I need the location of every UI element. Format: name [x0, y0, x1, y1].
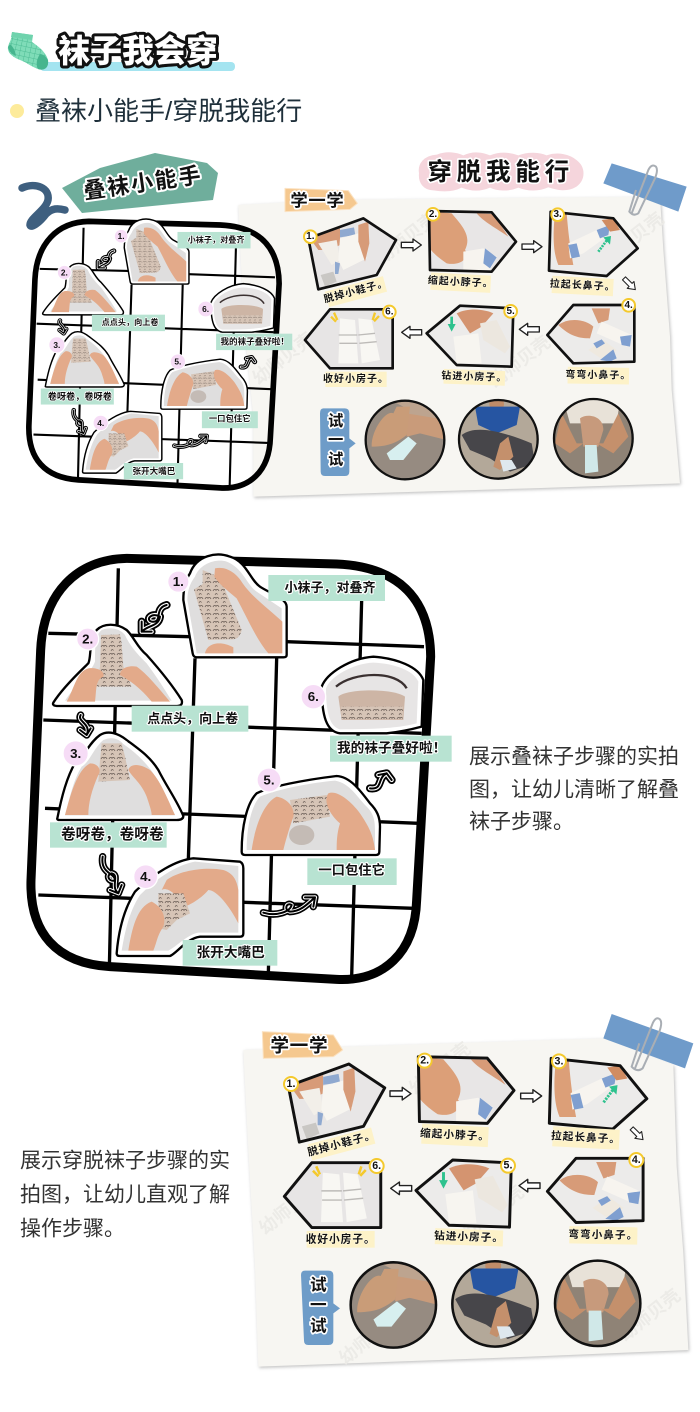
step badges: 2.: [420, 1055, 429, 1067]
try photo 2: [457, 397, 540, 480]
step badges: 4.: [624, 300, 633, 311]
paper sheet: [238, 197, 680, 497]
tag: 学一学: [285, 188, 357, 212]
step captions: 弯弯小鼻子。: [568, 1228, 638, 1242]
watermarks: 幼师贝壳: [335, 1308, 404, 1369]
fold captions: 我的袜子叠好啦！: [221, 335, 289, 346]
fold photos: [53, 555, 423, 956]
tag: 试一试: [301, 1271, 340, 1345]
fold badges: 5.: [174, 357, 181, 367]
fold badges: 1.: [173, 574, 184, 589]
title underline bar: [40, 62, 235, 71]
tape and paper clip: [603, 163, 687, 215]
fold captions: 小袜子，对叠齐: [188, 234, 245, 244]
try photo 3: [552, 397, 635, 478]
tag: 试一试: 一: [328, 432, 343, 449]
tag: 学一学: [262, 1032, 343, 1058]
step captions: 缩起小脖子。: [427, 273, 494, 290]
step captions: [306, 1124, 638, 1248]
icon: green sock: [8, 32, 48, 70]
fold badges: 5.: [263, 772, 275, 787]
try photo 1: [363, 400, 447, 480]
watermarks: [248, 208, 667, 392]
fold captions: [41, 232, 292, 479]
step badges: 1.: [287, 1078, 295, 1090]
step captions: 钻进小房子。: [441, 369, 508, 384]
heading: 穿脱我能行: [418, 152, 584, 192]
heading: 穿脱我能行: 穿脱我能行: [427, 158, 574, 186]
fold captions: 张开大嘴巴: [133, 465, 176, 476]
panel: shoe steps paper, top: [238, 152, 687, 497]
fold badges: [63, 571, 326, 889]
step badges: 6.: [385, 306, 394, 317]
step 6 photo: [303, 307, 395, 370]
step 5 photo: [425, 303, 515, 368]
fold badges: 2.: [82, 631, 93, 646]
step captions: 弯弯小鼻子。: [565, 368, 631, 382]
paper sheet: [243, 1038, 688, 1367]
text block: folding description: 图，让幼儿清晰了解叠: [469, 778, 679, 802]
step 1 photo: [305, 217, 398, 292]
tag: 试一试: 试: [310, 1275, 327, 1294]
tag: 试一试: 试: [328, 451, 343, 468]
fold badges: 4.: [97, 418, 104, 428]
watermarks: [255, 1038, 684, 1369]
try photo 3: [552, 1258, 643, 1347]
watermarks: 幼师贝壳: [255, 1178, 324, 1239]
try photo 2: [450, 1258, 540, 1348]
text block: dressing description: 拍图，让幼儿直观了解: [20, 1184, 230, 1206]
heading tag: 叠袜小能手: 叠袜小能手: [82, 162, 204, 204]
fold captions: 一口包住它: [318, 861, 385, 877]
panel: sock folding steps, small: [29, 219, 292, 488]
step captions: 收好小房子。: [323, 372, 389, 385]
fold captions: 我的袜子叠好啦！: [337, 739, 446, 755]
subheading text: 叠袜小能手/穿脱我能行: [35, 96, 302, 126]
watermarks: 幼师贝壳: [371, 208, 441, 269]
icon: blue squiggle: [22, 186, 65, 226]
step captions: 脱掉小鞋子。: [322, 276, 389, 306]
text block: folding description: [469, 746, 679, 834]
text block: folding description: 展示叠袜子步骤的实拍: [469, 746, 679, 768]
tag: 试一试: 一: [310, 1295, 327, 1314]
step badges: 5.: [506, 306, 515, 317]
step badges: 3.: [553, 209, 562, 220]
step 3 photo: [547, 210, 640, 277]
step captions: 拉起长鼻子。: [549, 277, 616, 293]
text block: dressing description: [20, 1150, 230, 1240]
fold badges: 1.: [118, 231, 125, 241]
watermarks: 幼师贝壳: [248, 328, 317, 389]
step badges: 5.: [504, 1160, 512, 1172]
step captions: 钻进小房子。: [434, 1229, 504, 1245]
step captions: [322, 272, 631, 387]
fold captions: 张开大嘴巴: [197, 944, 265, 960]
fold badges: 6.: [202, 304, 209, 314]
step 2 photo: [427, 210, 517, 272]
tape and paper clip: [603, 1014, 693, 1070]
tag: 试一试: 试: [310, 1316, 327, 1335]
step arrows: [390, 1087, 646, 1195]
watermarks: 幼师贝壳: [615, 1284, 684, 1345]
fold captions: 卷呀卷，卷呀卷: [61, 825, 164, 843]
fold captions: 点点头，向上卷: [147, 711, 238, 726]
step 4 photo: [547, 303, 637, 365]
step badges: [304, 208, 635, 318]
bullet dot: [10, 104, 24, 118]
watermarks: 幼师贝壳: [405, 1038, 474, 1099]
try photo 1: [348, 1262, 439, 1348]
watermarks: 幼师贝壳: [598, 208, 667, 269]
panel: shoe steps paper, bottom: [243, 1014, 693, 1369]
fold badges: 3.: [70, 746, 81, 761]
window frame: [29, 221, 279, 488]
swirl arrows: [60, 251, 255, 447]
step badges: 2.: [429, 209, 437, 220]
tag: 试一试: [320, 408, 356, 476]
watermarks: 幼师贝壳: [458, 1181, 527, 1242]
subheading with bullet: [10, 96, 302, 126]
fold captions: 小袜子，对叠齐: [285, 580, 375, 595]
fold photos: [43, 219, 275, 473]
watermarks: 幼师贝壳: [485, 331, 554, 392]
fold captions: 点点头，向上卷: [102, 317, 159, 327]
title block: [8, 32, 235, 71]
panel: sock folding steps, enlarged: [31, 555, 452, 979]
step captions: 缩起小脖子。: [420, 1127, 490, 1143]
window frame: [31, 558, 431, 979]
heading tag: 叠袜小能手: [62, 153, 218, 213]
swirl arrows: [80, 605, 392, 914]
fold captions: [50, 575, 452, 966]
step badges: 6.: [372, 1160, 381, 1172]
text block: dressing description: 展示穿脱袜子步骤的实: [20, 1150, 230, 1172]
step 2 photo: [416, 1056, 515, 1123]
fold badges: [49, 229, 213, 431]
fold captions: 卷呀卷，卷呀卷: [48, 391, 113, 402]
step badges: 1.: [306, 231, 315, 242]
step 6 photo: [282, 1160, 383, 1229]
text block: folding description: 袜子步骤。: [469, 810, 574, 834]
fold badges: 4.: [140, 869, 151, 884]
step 3 photo: [547, 1056, 649, 1130]
step captions: 收好小房子。: [306, 1232, 376, 1245]
tag: 学一学: 学一学: [270, 1035, 328, 1056]
fold badges: 3.: [53, 340, 60, 350]
step badges: 3.: [555, 1055, 563, 1067]
fold badges: 6.: [308, 689, 319, 704]
step 5 photo: [414, 1157, 513, 1229]
step arrows: [401, 239, 639, 338]
fold captions: 一口包住它: [209, 414, 250, 424]
text block: dressing description: 操作步骤。: [20, 1218, 125, 1240]
tag: 试一试: 试: [328, 413, 343, 430]
main title: 袜子我会穿: [58, 33, 218, 69]
fold badges: 2.: [61, 267, 68, 277]
tag: 学一学: 学一学: [290, 191, 344, 211]
step badges: [284, 1054, 643, 1173]
step badges: 4.: [632, 1154, 641, 1166]
step 1 photo: [285, 1062, 387, 1145]
step captions: 拉起长鼻子。: [551, 1129, 621, 1146]
step 4 photo: [547, 1156, 646, 1224]
step captions: 脱掉小鞋子。: [306, 1128, 377, 1159]
